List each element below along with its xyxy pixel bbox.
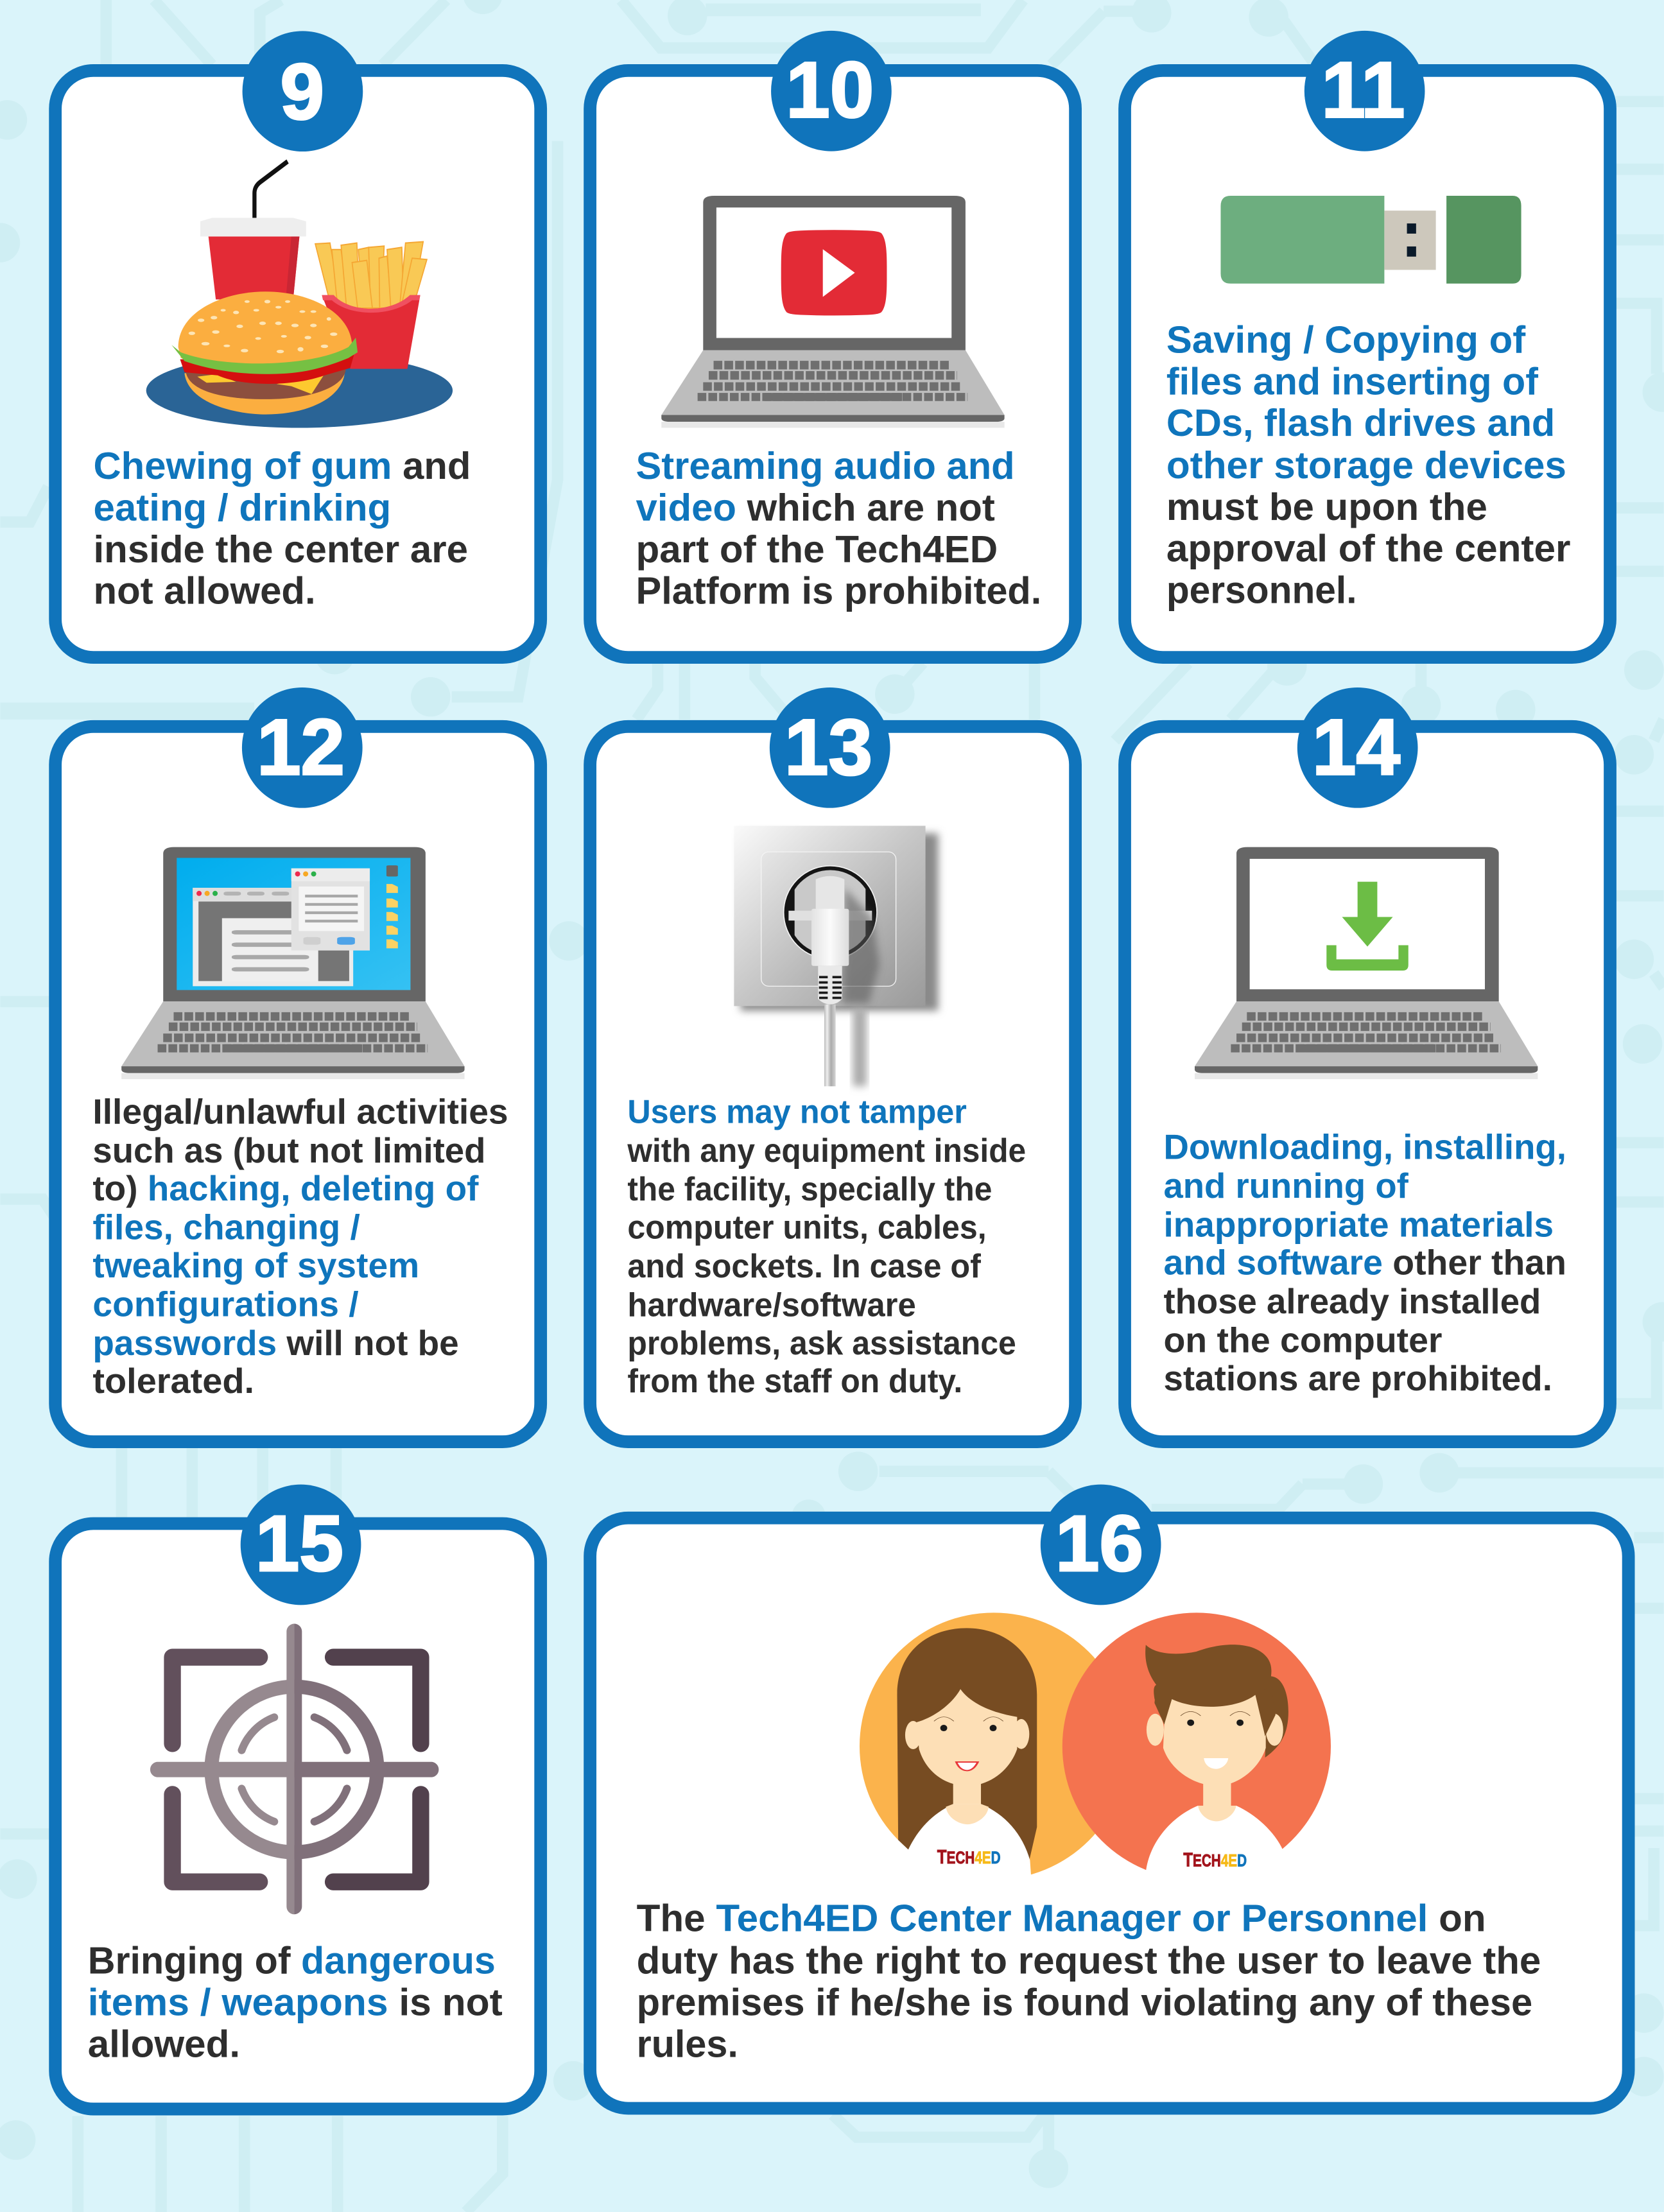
text: rule 13: computer units, cables, <box>627 1209 987 1246</box>
panel: rule 13 equipment tampering <box>590 687 1075 1442</box>
panel: rule 12 illegal activities <box>55 687 541 1442</box>
text: rule 12 <box>92 1091 508 1401</box>
text: rule 13: hardware/software <box>627 1286 916 1323</box>
number badge 15 <box>241 1485 361 1605</box>
panel: rule 15 weapons <box>55 1485 541 2109</box>
text: rule 9: not allowed. <box>94 569 316 612</box>
logo: Tech4ED on shirts <box>937 1845 1247 1871</box>
text: rule 14: and running of <box>1163 1166 1408 1205</box>
number badge 10: 10 <box>786 46 874 134</box>
logo: Tech4ED on shirts: TECH4ED <box>1183 1849 1247 1871</box>
text: rule 14: and software other than <box>1163 1243 1566 1283</box>
text: rule 13: the facility, specially the <box>627 1170 992 1207</box>
number badge 15: 15 <box>256 1500 343 1588</box>
text: rule 11: Saving / Copying of <box>1166 318 1525 361</box>
text: rule 14: Downloading, installing, <box>1163 1127 1566 1166</box>
number badge 16 <box>1041 1485 1161 1605</box>
text: rule 12: Illegal/unlawful activities <box>92 1091 508 1131</box>
icon: laptop with play button <box>661 196 1005 428</box>
logo: Tech4ED on shirts: TECH4ED <box>937 1845 1001 1868</box>
text: rule 16 <box>637 1897 1541 2065</box>
panel: rule 14 downloading <box>1125 687 1610 1442</box>
number badge 16: 16 <box>1055 1500 1143 1588</box>
text: rule 16: The Tech4ED Center Manager or Personnel on <box>637 1897 1486 1940</box>
text: rule 12: files, changing / <box>92 1207 360 1247</box>
text: rule 12: tweaking of system <box>92 1245 419 1285</box>
text: rule 16: duty has the right to request the user to leave the <box>637 1939 1541 1982</box>
text: rule 11: other storage devices <box>1166 444 1566 487</box>
text: rule 12: tolerated. <box>92 1361 254 1401</box>
text: rule 14: stations are prohibited. <box>1163 1358 1552 1398</box>
number badge 11 <box>1304 31 1425 151</box>
text: rule 14: inappropriate materials <box>1163 1204 1554 1244</box>
icon: laptop with download arrow <box>1195 847 1538 1079</box>
panel: rule 11 storage devices <box>1125 31 1610 657</box>
number badge 14 <box>1297 687 1417 808</box>
icon: burger, drink and fries <box>146 161 453 428</box>
text: rule 13 <box>627 1093 1026 1399</box>
number badge 12 <box>242 687 363 808</box>
text: rule 14: those already installed <box>1163 1281 1541 1321</box>
text: rule 15: items / weapons is not <box>88 1980 503 2023</box>
number badge 9: 9 <box>281 49 324 137</box>
icon: wall socket with plug <box>734 825 939 1086</box>
text: rule 15: Bringing of dangerous <box>88 1939 496 1982</box>
text: rule 12: configurations / <box>92 1284 359 1324</box>
text: rule 14 <box>1163 1127 1566 1398</box>
number badge 12: 12 <box>257 704 345 792</box>
icon: crosshair target <box>150 1624 438 1914</box>
text: rule 13: from the staff on duty. <box>627 1362 962 1399</box>
text: rule 15: allowed. <box>88 2022 240 2065</box>
panel: rule 9 food <box>55 31 541 657</box>
number badge 13: 13 <box>784 704 872 792</box>
icon: laptop with desktop windows <box>121 847 465 1079</box>
text: rule 16: rules. <box>637 2022 738 2065</box>
text: rule 9 <box>94 444 471 612</box>
text: rule 11: CDs, flash drives and <box>1166 401 1555 444</box>
text: rule 10: Streaming audio and <box>636 444 1015 487</box>
panel: rule 16 center personnel <box>590 1485 1629 2108</box>
number badge 13 <box>770 687 890 808</box>
text: rule 10 <box>636 444 1041 612</box>
text: rule 13: and sockets. In case of <box>627 1247 982 1284</box>
text: rule 9: eating / drinking <box>94 486 391 529</box>
number badge 11: 11 <box>1321 46 1405 134</box>
text: rule 11: files and inserting of <box>1166 359 1538 402</box>
text: rule 11 <box>1166 318 1570 612</box>
panel: rule 10 streaming <box>590 31 1075 657</box>
text: rule 14: on the computer <box>1163 1320 1443 1360</box>
text: rule 16: premises if he/she is found violating any of these <box>637 1980 1532 2023</box>
number badge 14: 14 <box>1312 704 1400 792</box>
text: rule 10: part of the Tech4ED <box>636 528 998 571</box>
text: rule 11: approval of the center <box>1166 527 1570 570</box>
number badge 10 <box>771 31 892 151</box>
text: rule 12: passwords will not be <box>92 1323 459 1363</box>
text: rule 15 <box>88 1939 503 2065</box>
text: rule 10: video which are not <box>636 486 995 529</box>
text: rule 13: with any equipment inside <box>627 1132 1026 1169</box>
text: rule 12: such as (but not limited <box>92 1130 485 1170</box>
text: rule 13: Users may not tamper <box>627 1093 967 1130</box>
text: rule 10: Platform is prohibited. <box>636 569 1041 612</box>
text: rule 13: problems, ask assistance <box>627 1324 1016 1361</box>
icon: usb flash drive <box>1220 196 1521 284</box>
text: rule 9: inside the center are <box>94 528 468 571</box>
text: rule 9: Chewing of gum and <box>94 444 471 487</box>
icon: two staff portraits <box>860 1612 1331 1881</box>
text: rule 12: to) hacking, deleting of <box>92 1168 479 1208</box>
text: rule 11: personnel. <box>1166 569 1357 612</box>
text: rule 11: must be upon the <box>1166 485 1487 528</box>
number badge 9 <box>243 31 363 151</box>
